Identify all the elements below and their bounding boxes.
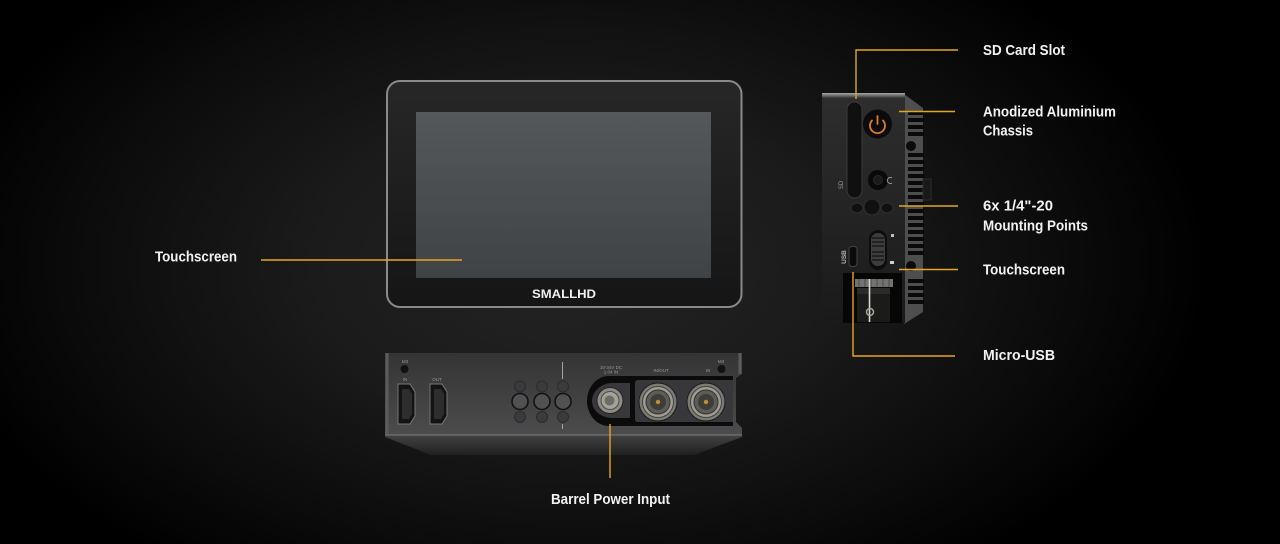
bottom view: connector panel: IN/OUT [653,368,669,373]
front view: monitor [387,81,742,307]
connector recess [587,376,733,426]
bottom view: connector panel: 10-34V DC [600,365,623,370]
side chassis body [822,93,905,323]
label: Mounting Points [983,218,1088,234]
bottom view: connector panel: IN [706,368,710,373]
label: Barrel Power Input [551,492,670,508]
callout: mounting points [899,198,1088,234]
callout: anodized aluminium chassis [899,104,1116,140]
leader line [609,424,611,478]
heat-sink fins [904,94,931,324]
label: Anodized Aluminium [983,104,1116,120]
bottom view: connector panel: 1.04 IN [604,370,618,374]
micro-USB port: USB [841,250,848,264]
SMALLHD logo: SMALLHD [532,287,596,301]
mounting holes [400,365,726,373]
lower chassis wedge [385,434,742,455]
label: Touchscreen [983,262,1065,278]
label: 6x 1/4"-20 [983,198,1053,214]
BNC connector, side profile [843,273,902,323]
side view: monitor edge: SD [839,180,845,189]
power button [863,110,892,138]
callout: barrel power input [551,424,670,508]
bottom view: connector panel [385,353,742,455]
label: Touchscreen [155,250,237,266]
BNC connectors [639,383,725,421]
HDMI ports: IN [403,377,407,382]
bottom view: connector panel: M3 [402,359,409,364]
monitor bezel [387,81,742,307]
callout: SD card slot [856,43,1065,99]
micro-USB port [841,246,857,266]
label: Chassis [983,124,1033,140]
bottom view: connector panel: M3 [718,359,725,364]
barrel power connector [597,388,623,414]
HDMI ports [398,377,447,424]
SD card slot [847,102,862,198]
HDMI ports: OUT [432,377,442,382]
callout: micro-USB [853,272,1055,364]
leader line [853,272,955,356]
label: Micro-USB [983,348,1055,364]
leader line [899,110,955,112]
button cluster [512,381,571,422]
headphone jack [868,170,892,190]
touchscreen display [416,112,711,278]
leader line [261,259,462,261]
connector panel face [385,353,742,435]
label [983,198,1088,234]
leader line [899,205,958,207]
slider switch [869,230,894,270]
leader line [856,50,958,99]
label [983,104,1116,140]
side view: monitor edge [822,93,931,324]
label: SD Card Slot [983,43,1065,59]
leader line [899,268,958,270]
mounting points [851,199,893,215]
